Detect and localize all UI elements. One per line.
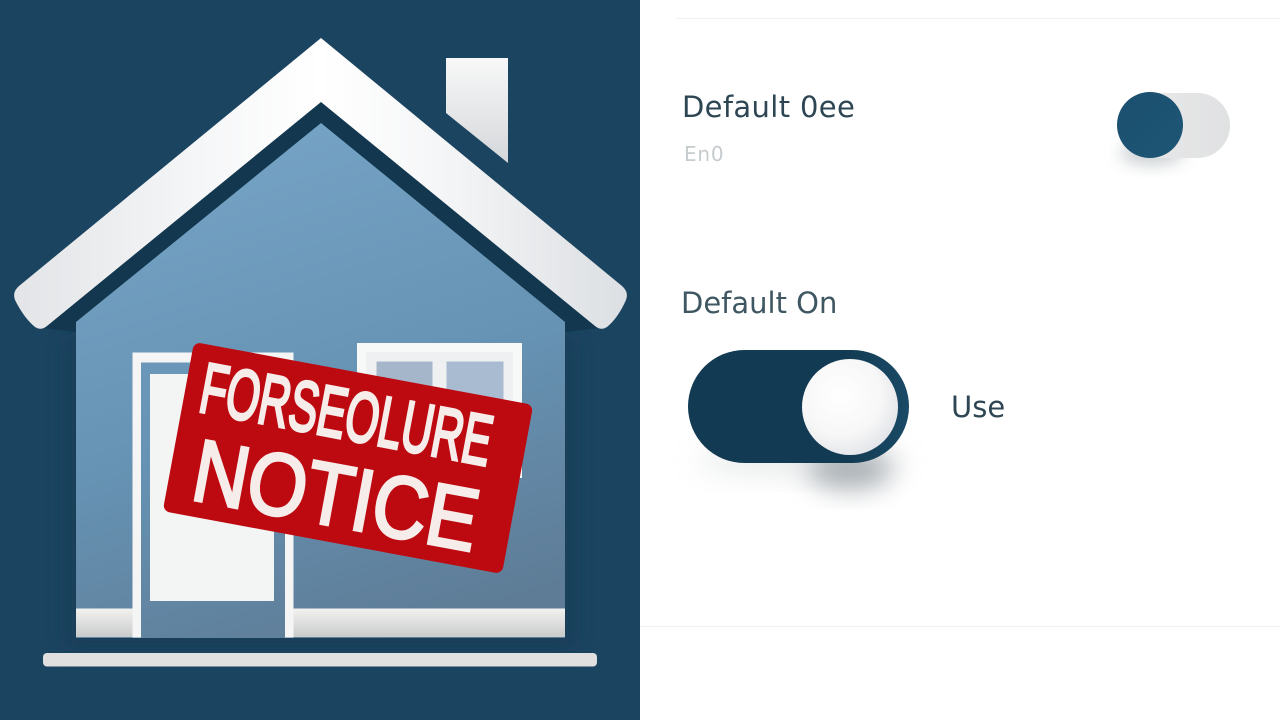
base ledges: [76, 608, 565, 637]
panel: house illustration: [0, 0, 640, 720]
toggle: small switch: [1116, 92, 1230, 172]
roof shadow: [42, 100, 600, 332]
panel: settings: [640, 0, 1280, 720]
icon: chimney: [446, 58, 508, 163]
toggle: large switch: [688, 350, 909, 505]
text: small label: En0: [684, 142, 724, 166]
foreclosure notice stamp: NOTICE: [186, 420, 487, 570]
ground line: [43, 653, 597, 666]
roof: [14, 38, 627, 329]
heading: default on: Default On: [681, 286, 837, 320]
house wall: [76, 123, 565, 638]
heading: default one: Default 0ee: [682, 90, 855, 124]
foreclosure notice stamp: [163, 342, 533, 574]
wall shadow: [66, 335, 574, 651]
text: use label: Use: [951, 390, 1005, 424]
door: [132, 352, 294, 638]
window: [357, 343, 522, 478]
